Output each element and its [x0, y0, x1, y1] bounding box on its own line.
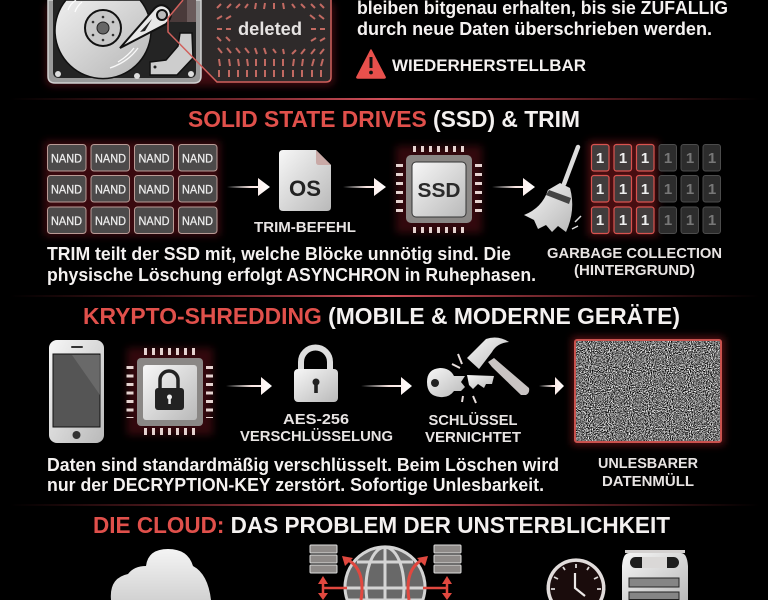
text block: hdd explanation: durch neue Daten überschrieben werden.: [357, 19, 712, 39]
arrow: [226, 377, 272, 395]
label: garbage collection: (HINTERGRUND): [574, 262, 695, 279]
bit grid: 1: [596, 181, 604, 198]
heading: cloud: DIE CLOUD: DAS PROBLEM DER UNSTERBLICHKEIT: [93, 512, 670, 538]
noise block: [572, 337, 724, 445]
bit grid: 1: [596, 212, 604, 229]
icon: backup tapes: [622, 550, 688, 600]
deleted data area: [168, 0, 331, 82]
arrow: [492, 178, 535, 196]
screws: [55, 71, 194, 79]
label: garbage collection: GARBAGE COLLECTION: [547, 245, 722, 262]
NAND grid: NAND: [182, 152, 213, 166]
bit grid: 1: [641, 212, 649, 229]
globe: [345, 547, 425, 600]
label: unreadable data: [598, 455, 698, 490]
icon: SSD chip: [396, 146, 482, 233]
icon: cloud: [111, 549, 211, 600]
label: unreadable data: DATENMÜLL: [602, 473, 694, 490]
text block: hdd explanation: [357, 0, 728, 39]
NAND grid: [44, 141, 220, 236]
deleted label: deleted: [238, 19, 302, 39]
NAND grid: NAND: [138, 152, 170, 166]
bit grid: 1: [708, 150, 716, 167]
icon: OS document: [279, 150, 331, 211]
bit grid: 1: [619, 212, 627, 229]
icon: clock: [546, 558, 606, 600]
arrow: [227, 178, 270, 196]
bit grid: 1: [619, 181, 627, 198]
NAND grid: NAND: [182, 214, 213, 228]
icon: OS document: OS: [289, 176, 321, 201]
heading: SSD: SOLID STATE DRIVES (SSD) & TRIM: [188, 106, 580, 132]
bit grid: 1: [686, 212, 694, 229]
panel: hard disk drive: [46, 0, 334, 86]
hdd body: [48, 0, 201, 83]
deleted area outline: [168, 0, 331, 82]
icon: SSD chip: SSD: [418, 180, 460, 202]
servers left: [310, 545, 337, 573]
bit grid: [588, 141, 720, 236]
bit grid: 1: [708, 212, 716, 229]
NAND grid: NAND: [138, 214, 170, 228]
bit grid: 1: [686, 181, 694, 198]
text block: TRIM explanation: [47, 244, 536, 285]
NAND grid: NAND: [182, 182, 213, 196]
NAND grid: NAND: [95, 214, 126, 228]
hammer: [467, 338, 529, 395]
bit grid: 1: [686, 150, 694, 167]
idle bits: [659, 144, 720, 234]
label: AES-256: AES-256: [283, 411, 349, 428]
label: key destroyed: SCHLÜSSEL: [428, 412, 518, 429]
bit grid: 1: [708, 181, 716, 198]
bit grid: 1: [664, 150, 672, 167]
arrow: [343, 178, 386, 196]
NAND grid: NAND: [95, 152, 126, 166]
bit grid: 1: [596, 150, 604, 167]
NAND grid: NAND: [51, 152, 82, 166]
arrow: [361, 377, 412, 395]
text block: crypto explanation: Daten sind standardmäßig verschlüsselt. Beim Löschen wird: [47, 455, 559, 475]
bit grid: 1: [641, 150, 649, 167]
icon: padlock: [294, 348, 338, 402]
label: TRIM command: TRIM-BEFEHL: [254, 219, 356, 236]
label: key destroyed: VERNICHTET: [425, 429, 521, 446]
NAND grid: NAND: [51, 182, 82, 196]
icon: phone: [49, 340, 104, 443]
broken key: [427, 354, 494, 403]
actuator arm: [120, 5, 193, 75]
icon: globe and servers: [310, 545, 461, 600]
label: garbage collection: [547, 245, 722, 279]
icon: warning triangle: [357, 50, 385, 78]
text block: TRIM explanation: physische Löschung erfolgt ASYNCHRON in Ruhephasen.: [47, 265, 536, 285]
text block: TRIM explanation: TRIM teilt der SSD mit, welche Blöcke unnötig sind. Die: [47, 244, 511, 264]
bit grid: 1: [664, 181, 672, 198]
icon: encrypted chip: [127, 348, 213, 435]
heading: crypto shredding: KRYPTO-SHREDDING (MOBILE & MODERNE GERÄTE): [83, 303, 680, 329]
NAND grid: NAND: [95, 182, 126, 196]
icon: broken key and hammer: [427, 338, 529, 403]
bit grid: 1: [641, 181, 649, 198]
text block: crypto explanation: nur der DECRYPTION-KEY zerstört. Sofortige Unlesbarkeit.: [47, 475, 544, 495]
label: AES-256: VERSCHLÜSSELUNG: [240, 428, 393, 445]
bit grid: 1: [664, 212, 672, 229]
hdd glow: [46, 2, 334, 86]
servers right: [434, 545, 461, 573]
freed bits: [592, 144, 654, 234]
NAND grid: NAND: [51, 214, 82, 228]
label: key destroyed: [425, 412, 521, 446]
label: recoverable: WIEDERHERSTELLBAR: [392, 56, 586, 75]
replication arrows: [318, 556, 452, 600]
icon: broom: [524, 147, 581, 232]
arrow: [539, 377, 564, 395]
label: AES-256: [240, 411, 393, 445]
text block: crypto explanation: [47, 455, 559, 495]
label: unreadable data: UNLESBARER: [598, 455, 698, 472]
NAND grid: NAND: [138, 182, 170, 196]
platter: [55, 0, 151, 79]
bit grid: 1: [619, 150, 627, 167]
